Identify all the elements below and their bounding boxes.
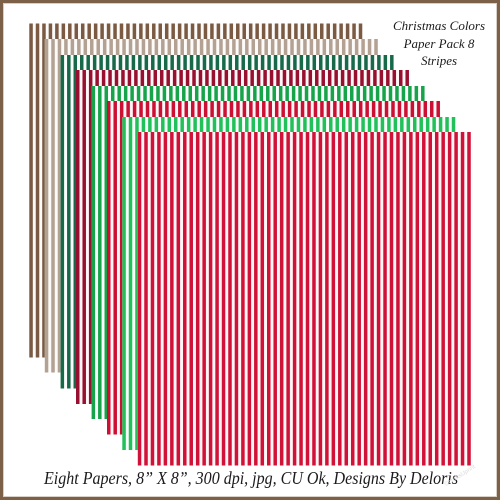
paper 7: bright green stripes [122,117,456,450]
footer caption: Eight Papers, 8” X 8”, 300 dpi, jpg, CU Ok, Designs By Deloris [44,468,458,488]
paper 2: tan stripes [45,39,378,372]
title: Paper Pack 8 [404,36,474,51]
paper 6: red stripes [107,101,440,434]
paper 1: brown stripes [29,24,363,358]
paper 8: front red stripes [138,132,471,466]
paper 5: green stripes [92,86,425,419]
title: Stripes [421,53,457,68]
title [393,18,485,68]
title: Christmas Colors [393,18,485,33]
watermark: ©craftsUprint [444,464,477,488]
paper 4: dark red stripes [76,70,409,404]
paper 3: dark green stripes [61,55,394,388]
